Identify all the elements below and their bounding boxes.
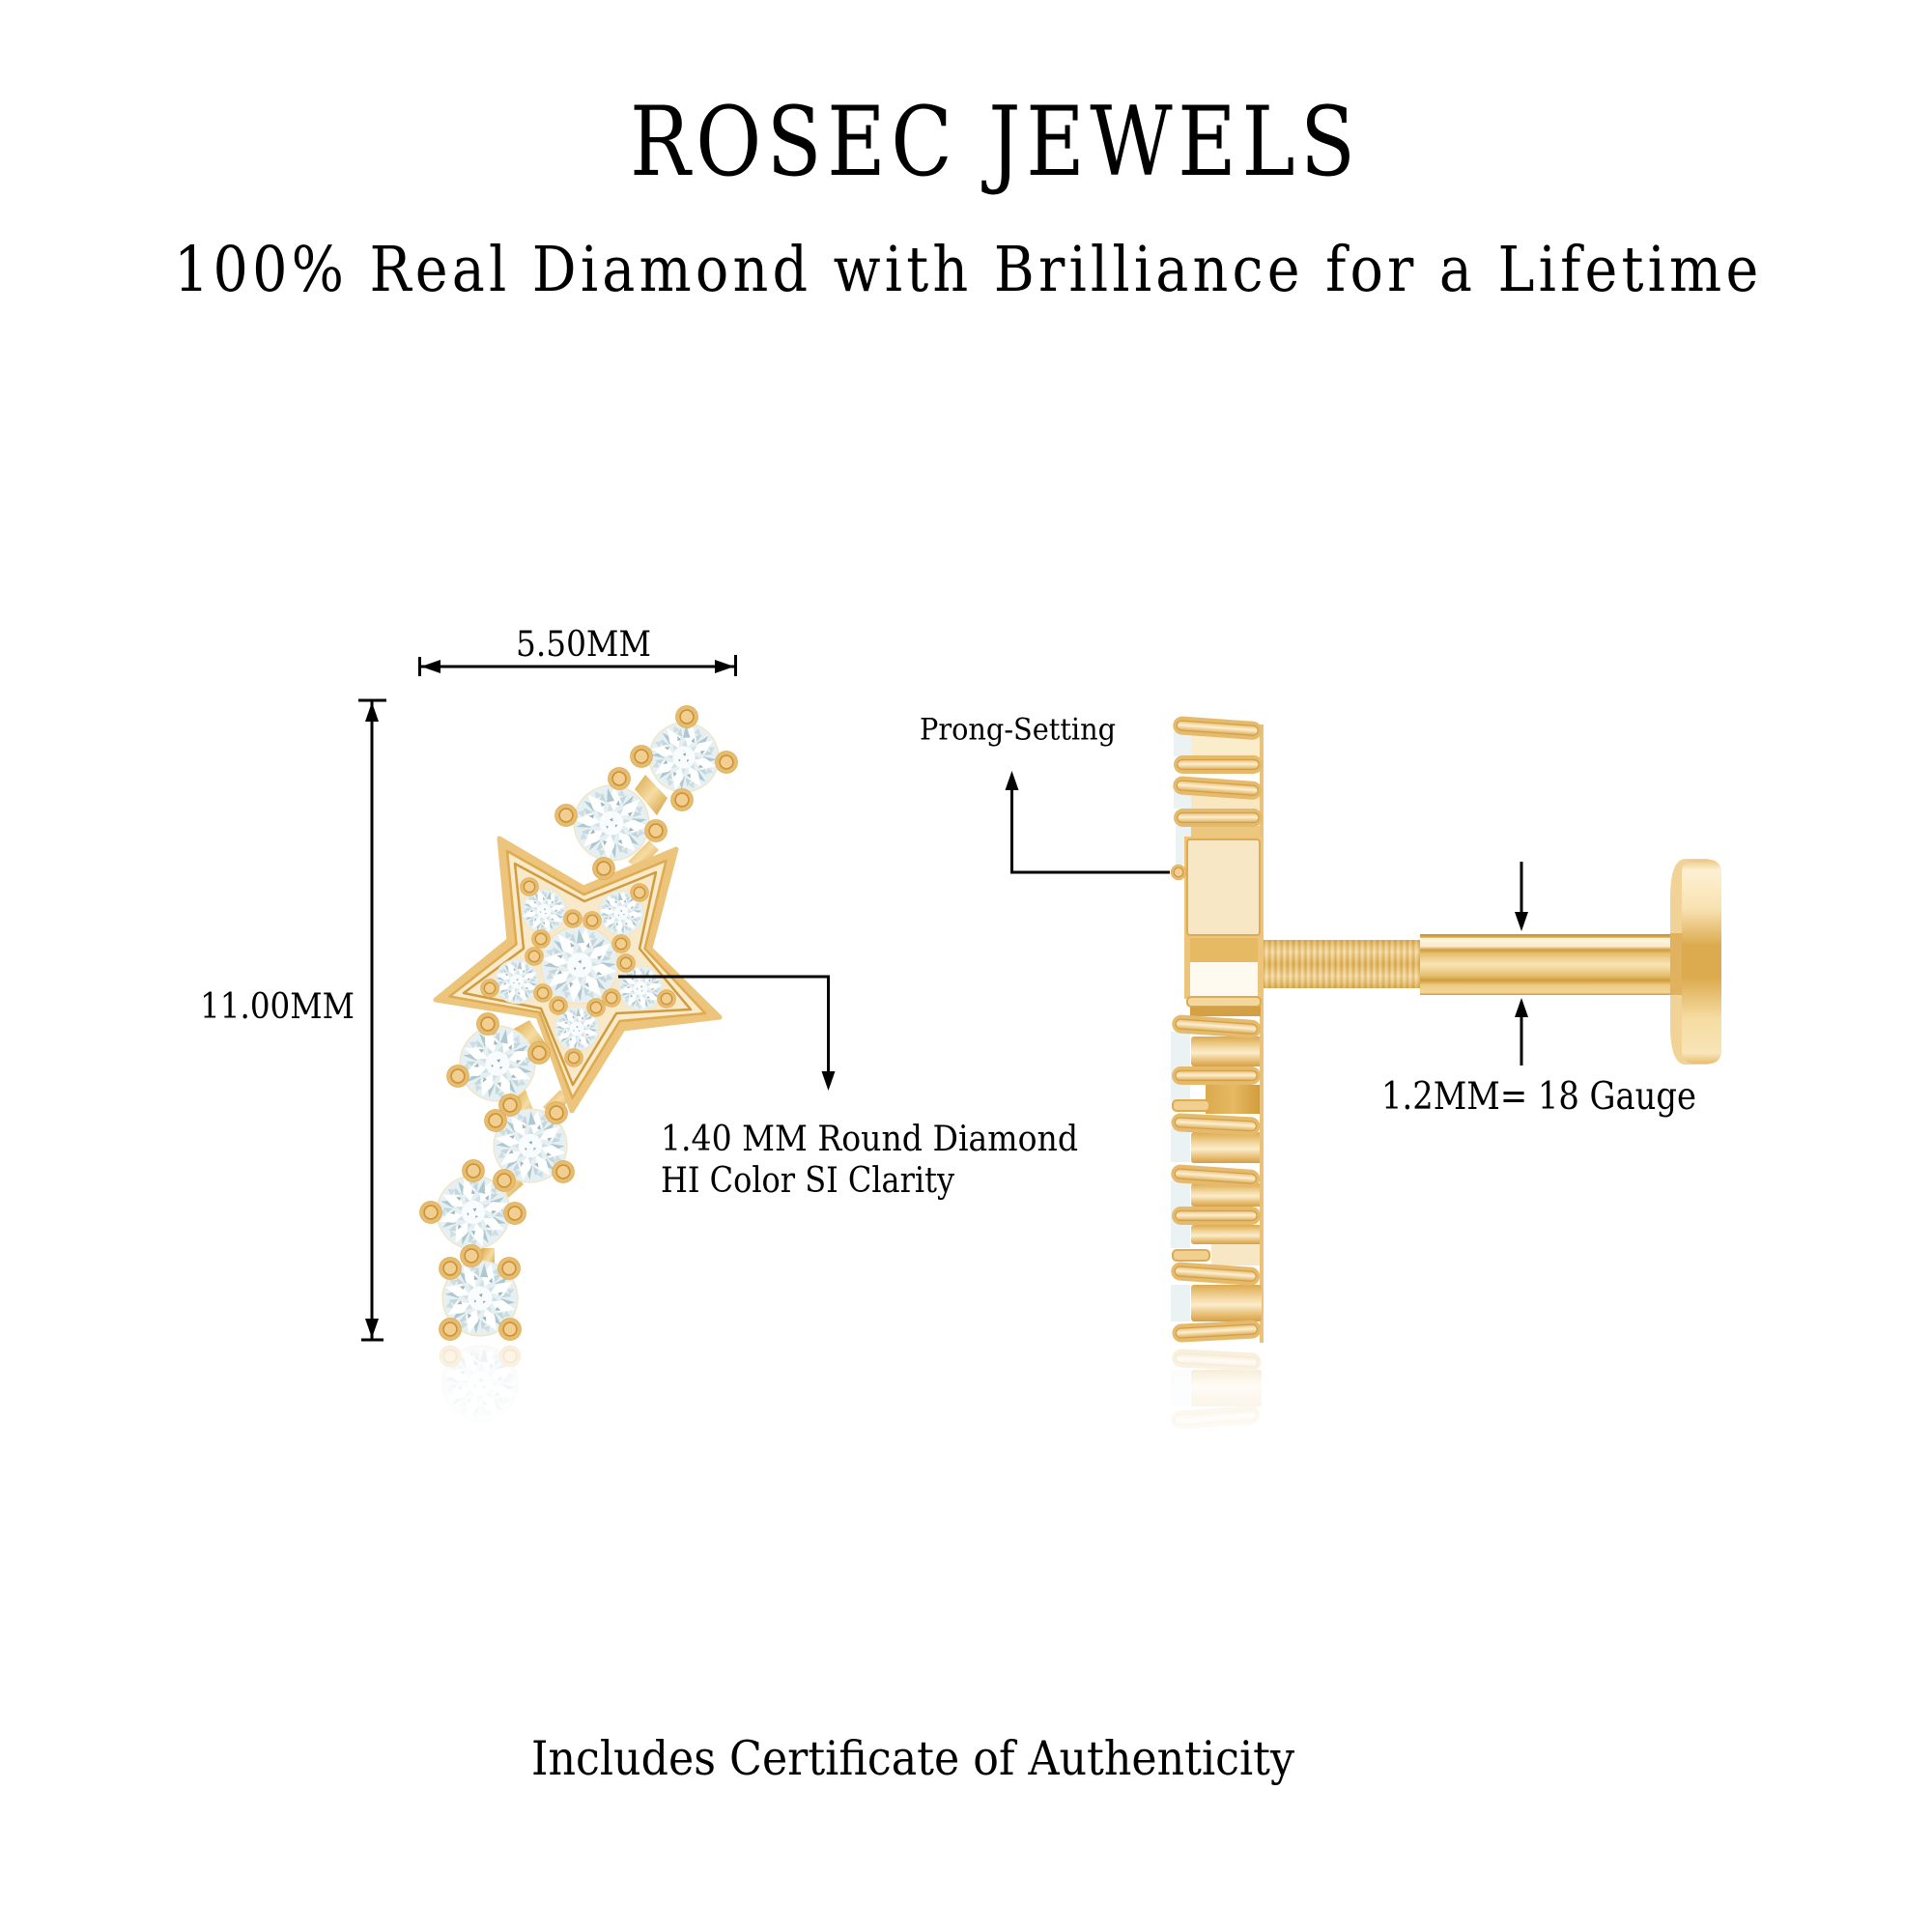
star setting bbox=[436, 838, 720, 1111]
diamond spec bbox=[661, 1120, 1078, 1201]
outer diamonds bbox=[420, 713, 728, 1349]
width label: 5.50MM bbox=[516, 625, 651, 665]
connector struts bbox=[481, 775, 668, 1271]
side prong bead bbox=[1171, 865, 1186, 880]
prong label: Prong-Setting bbox=[920, 713, 1116, 748]
side prong bars bbox=[1171, 716, 1263, 1343]
diamond spec: HI Color SI Clarity bbox=[661, 1161, 955, 1201]
gauge label: 1.2MM= 18 Gauge bbox=[1381, 1075, 1696, 1119]
gauge callout bbox=[1381, 862, 1696, 1119]
center block bbox=[1184, 837, 1264, 1016]
width dimension bbox=[418, 625, 737, 676]
front view reflection bbox=[439, 1345, 522, 1413]
height label: 11.00MM bbox=[200, 987, 355, 1027]
leader arrow bbox=[1005, 771, 1170, 872]
footer: Includes Certificate of Authenticity bbox=[531, 1731, 1294, 1786]
height dimension bbox=[200, 699, 386, 1341]
side diamonds bbox=[1171, 731, 1191, 1248]
post bbox=[1420, 934, 1681, 995]
diamond spec: 1.40 MM Round Diamond bbox=[661, 1120, 1078, 1159]
screw thread bbox=[1264, 940, 1420, 988]
front view earring bbox=[419, 705, 738, 1349]
side view earring bbox=[1171, 716, 1721, 1343]
top arrow bbox=[1515, 862, 1528, 931]
diamond callout bbox=[618, 977, 1078, 1201]
side blocks bbox=[1191, 724, 1264, 1343]
star prongs bbox=[481, 877, 676, 1066]
bottom arrow bbox=[1515, 998, 1528, 1065]
prong setting callout bbox=[920, 713, 1170, 872]
back disc bbox=[1670, 859, 1721, 1065]
title: ROSEC JEWELS bbox=[630, 86, 1355, 198]
subtitle: 100% Real Diamond with Brilliance for a Lifetime bbox=[174, 234, 1758, 306]
star diamonds bbox=[487, 879, 673, 1058]
outer prongs bbox=[419, 705, 738, 1341]
leader arrow bbox=[618, 977, 835, 1091]
side view reflection bbox=[1171, 1349, 1262, 1430]
